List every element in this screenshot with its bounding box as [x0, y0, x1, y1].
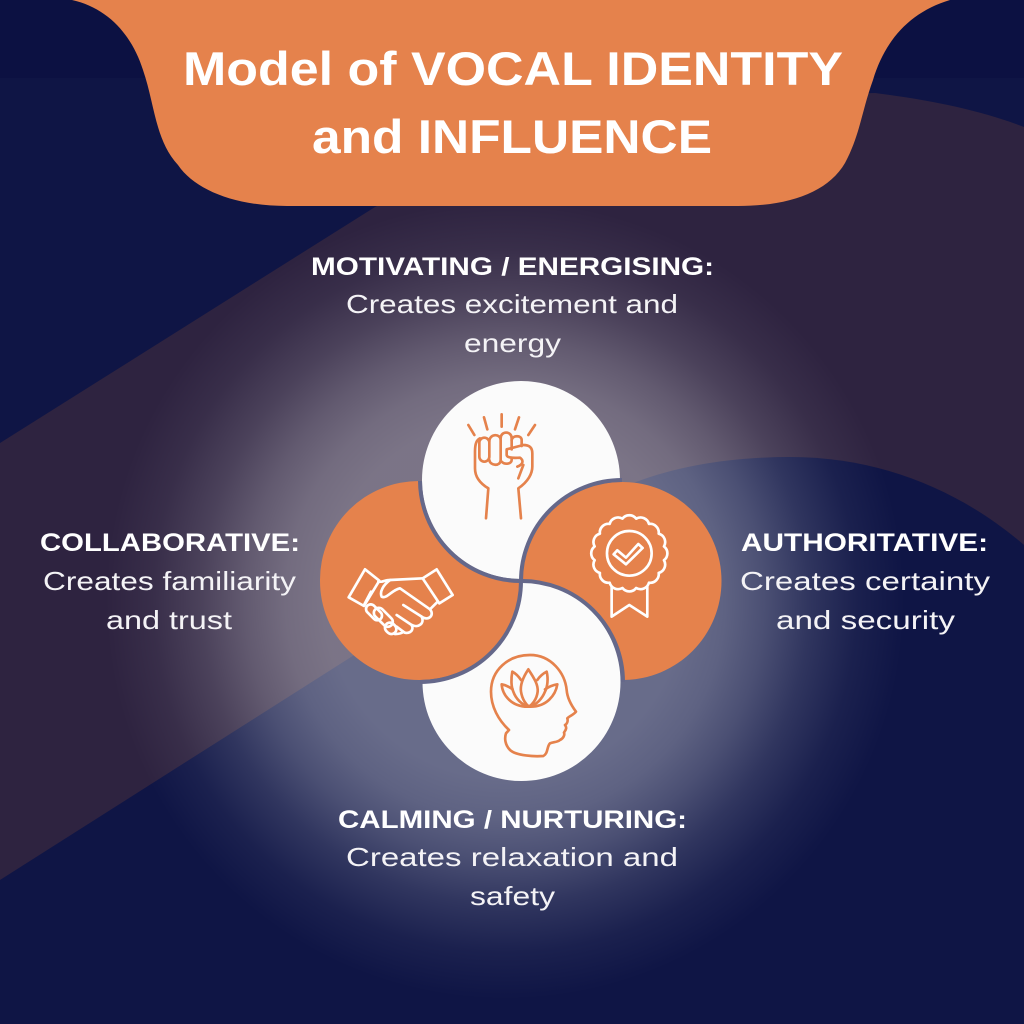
label: collaborative [40, 529, 300, 635]
label: calming: CALMING / NURTURING: [338, 806, 687, 834]
petal: right orange [521, 482, 722, 682]
label: motivating: Creates excitement and [346, 289, 678, 319]
title [183, 42, 843, 163]
title: and INFLUENCE [312, 110, 712, 163]
petal: bottom white [421, 581, 621, 781]
icon: fist [468, 414, 535, 518]
title banner [72, 0, 950, 206]
label: authoritative [740, 529, 990, 635]
label: authoritative: Creates certainty [740, 566, 990, 596]
separators between petals [420, 480, 623, 682]
icon: rosette badge [585, 509, 673, 617]
icon: head with lotus [491, 655, 576, 756]
icon: handshake [349, 569, 453, 636]
label: motivating [311, 253, 714, 358]
label: authoritative: and security [776, 605, 955, 635]
label: motivating: energy [464, 328, 561, 358]
petal: top white [422, 381, 620, 581]
label: calming: Creates relaxation and [346, 842, 678, 872]
label: collaborative: Creates familiarity [43, 566, 296, 596]
pinwheel diagram [320, 381, 722, 781]
title: Model of VOCAL IDENTITY [183, 42, 843, 95]
petal: left orange [320, 481, 521, 680]
label: calming [338, 806, 687, 911]
label: motivating: MOTIVATING / ENERGISING: [311, 253, 714, 281]
label: collaborative: and trust [106, 605, 233, 635]
label: collaborative: COLLABORATIVE: [40, 529, 300, 557]
label: calming: safety [470, 881, 555, 911]
label: authoritative: AUTHORITATIVE: [741, 529, 988, 557]
